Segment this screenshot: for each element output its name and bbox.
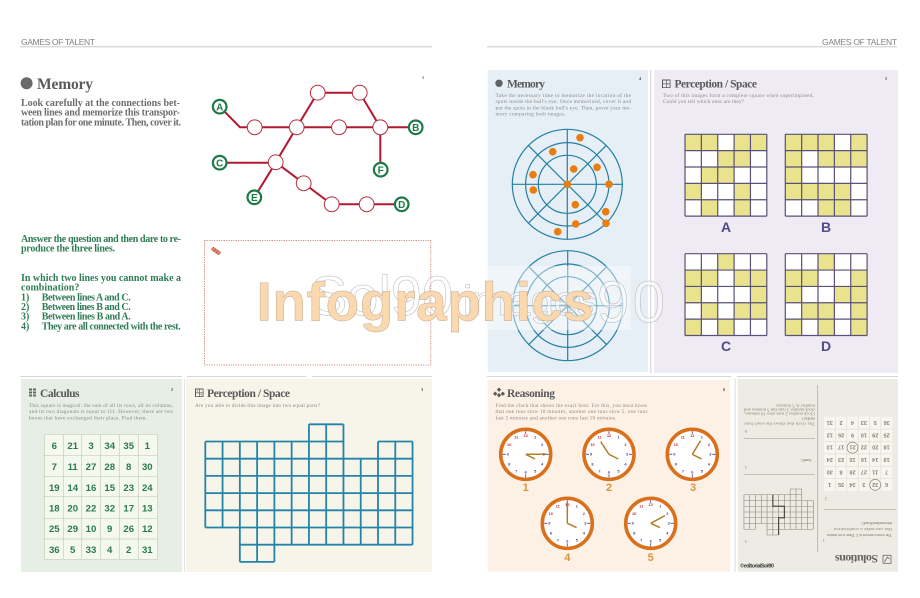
clock 3: 8	[675, 461, 678, 466]
clock 1	[501, 429, 551, 479]
magic square: 36	[49, 545, 60, 556]
clock 4: 1	[576, 503, 579, 508]
clock 5: 3	[668, 521, 671, 526]
blank bull's eye	[513, 251, 623, 361]
clock numbers: 5	[648, 552, 654, 564]
solution 2: magic square: 6	[885, 481, 888, 487]
solution 1: 1	[822, 538, 825, 543]
clock 2: 4	[624, 461, 627, 466]
watermark: Sol90images outline	[310, 264, 665, 335]
reasoning instructions: that one runs slow 10 minutes, another one runs slow 5, one runs	[496, 409, 648, 415]
solution 2: magic square: 7	[885, 468, 888, 474]
panel: perception squares	[654, 70, 898, 373]
solution 2: magic square: 2	[840, 419, 843, 425]
clock 4: 8	[550, 530, 553, 535]
solution 2: magic square: 19	[883, 456, 890, 462]
magic square: 19	[49, 483, 60, 494]
question text: Answer the question and then dare to re-	[21, 234, 181, 245]
magic square: 17	[123, 504, 134, 514]
solution 2: magic square: 11	[872, 468, 878, 474]
transport line map: E	[251, 193, 258, 204]
transport line map: C	[216, 158, 223, 169]
icon: memory dot	[21, 77, 33, 89]
question text: 2)	[21, 302, 29, 313]
clock numbers: 1	[523, 482, 529, 494]
magic square: 18	[49, 504, 60, 514]
magic square: 6	[52, 441, 57, 452]
calculus instructions: and its two diagonals is equal to 111. However, there are two	[29, 409, 173, 415]
reasoning instructions: Find the clock that shows the exact hour. For this, you must know	[496, 403, 648, 409]
clock 1: 12	[524, 433, 529, 438]
solution 2: magic square: 28	[849, 468, 856, 474]
magic square: 31	[142, 545, 153, 556]
clock 2: 1	[617, 434, 620, 439]
magic square: 21	[67, 441, 79, 452]
solution 2: magic square: 9	[851, 431, 854, 437]
square labels: A	[721, 219, 731, 235]
magic square: 14	[67, 483, 79, 494]
clock 2: 3	[626, 452, 629, 457]
solution 3: divided grid: 3	[744, 539, 747, 544]
solution 2: magic square: 8	[840, 468, 843, 474]
answer box with dotted border	[204, 240, 431, 365]
clock 4: 10	[549, 511, 553, 516]
watermark: Sol90images outline: 90	[597, 270, 665, 335]
clock 4: 9	[548, 521, 551, 526]
solution 2: magic square: 32	[872, 481, 878, 487]
clock 3: 1	[701, 434, 704, 439]
squares instructions: Two of this images form a complete square when superimposed.	[663, 92, 814, 99]
solution 2: magic square: 17	[838, 444, 844, 450]
bull's eye with spots	[512, 129, 622, 239]
magic square: 10	[86, 524, 96, 535]
reasoning instructions	[496, 403, 648, 421]
solution 5: A and C.	[800, 458, 812, 463]
clock 5: 6	[650, 538, 653, 543]
heading: Calculus: Calculus	[40, 388, 80, 400]
solution 2: magic square: 16	[861, 456, 867, 462]
solution 1: that can make a combination	[833, 527, 892, 532]
solution 6	[743, 402, 815, 434]
clock 1: 7	[515, 468, 517, 473]
question text: combination?	[21, 283, 79, 294]
question text	[21, 234, 181, 332]
clock 2: 6	[608, 469, 611, 474]
solution 2: magic square: 10	[861, 431, 867, 437]
transport line map: D	[398, 200, 405, 211]
solution 2: magic square: 15	[849, 456, 856, 462]
magic square: 7	[52, 462, 57, 473]
heading: Memory: Memory	[37, 76, 93, 93]
magic square: 9	[107, 524, 112, 535]
solution 6: Clock number 2 runs slow 10 minutes,	[744, 411, 815, 417]
solution 2: magic square: 3	[862, 481, 865, 487]
solution 1: between lines B and C.	[860, 521, 892, 526]
solutions dividers	[744, 385, 896, 552]
question text: Between lines B and C.	[42, 302, 131, 313]
magic square: 4	[107, 545, 113, 556]
square labels: D	[821, 338, 831, 354]
magic square: 15	[104, 483, 116, 494]
clock 3: 12	[690, 433, 695, 438]
instructions: ween lines and memorize this transpor-	[21, 108, 180, 119]
solution 5: 5	[744, 464, 747, 470]
watermark	[256, 264, 665, 335]
clock 1: 11	[514, 434, 519, 439]
memory instructions: Take the necessary time to memorize the location of the	[496, 92, 632, 99]
clock 1: 1	[534, 434, 537, 439]
panel: perception space left	[186, 379, 432, 572]
watermark: Infographics: Infographics	[256, 271, 594, 333]
clock 5: 8	[633, 530, 636, 535]
clock 1: 8	[508, 461, 511, 466]
icon: diamond cluster	[493, 388, 505, 397]
clock 5: 4	[666, 530, 669, 535]
instructions	[21, 98, 182, 128]
bottom rule lines left	[20, 376, 432, 378]
squares instructions: Could you tell which ones are they?	[663, 99, 745, 105]
clock 2: 9	[590, 452, 593, 457]
page number 1: 1	[422, 75, 425, 80]
solution 2: magic square: 26	[838, 431, 844, 437]
clock 3: 7	[682, 468, 684, 473]
clock 3: 3	[709, 452, 712, 457]
solution 2: magic square: 35	[838, 481, 844, 487]
magic square	[44, 434, 158, 559]
magic square: 22	[86, 504, 96, 514]
question text: produce the three lines.	[21, 244, 116, 255]
clock numbers	[523, 482, 696, 564]
panel divider left	[184, 379, 185, 572]
magic square: 26	[123, 524, 134, 535]
magic square: 11	[68, 462, 78, 473]
transport line map: A	[216, 102, 223, 113]
solution 1	[822, 521, 892, 543]
clock numbers: 2	[606, 482, 612, 494]
solution 2: magic square: 18	[883, 444, 890, 450]
magic square: 27	[86, 462, 96, 473]
squares instructions	[663, 92, 814, 105]
page number 3: 3	[421, 387, 424, 392]
heading: Perception / Space right: Perception / Space	[674, 78, 757, 90]
header: left page: GAMES OF TALENT	[21, 37, 95, 47]
solution 2: magic square: 33	[861, 419, 867, 425]
magic square: 30	[142, 462, 153, 473]
memory instructions	[496, 92, 632, 118]
panel: calculus	[21, 379, 182, 572]
clock 3: 5	[701, 468, 704, 473]
memory instructions: put the spots in the blank bull's eye. Then, prove your me-	[496, 105, 631, 111]
icon: perception small	[662, 80, 670, 88]
question text: In which two lines you cannot make a	[21, 273, 181, 284]
square labels	[721, 219, 831, 354]
icon: pencil	[211, 246, 221, 256]
clock 5: 9	[632, 521, 635, 526]
icon: solutions checkbox	[883, 555, 891, 563]
heading: Memory small: Memory	[507, 78, 545, 90]
square labels: C	[721, 338, 731, 354]
clock 4: 12	[565, 502, 570, 507]
solution 2: magic square: 5	[874, 419, 877, 425]
solution 5	[744, 458, 812, 470]
clock 5: 2	[666, 511, 669, 516]
watermark band	[488, 266, 631, 330]
upside-down solutions content	[743, 385, 896, 566]
solution 6: clock number 3 runs fast 5 minutes and	[743, 407, 815, 412]
panel: solutions	[738, 379, 898, 572]
page number 4: 4	[639, 76, 642, 81]
clock 1: 5	[534, 468, 537, 473]
clock 1: 4	[541, 461, 544, 466]
panel: memory bull's eye	[488, 70, 648, 372]
clock 2: 10	[590, 442, 595, 447]
magic square: 20	[67, 504, 78, 514]
solution 2: magic square: 30	[827, 468, 833, 474]
solution 2: magic square	[824, 417, 892, 502]
transport line map: F	[378, 165, 384, 176]
solution 2: magic square: 2	[824, 496, 827, 502]
header: right page: GAMES OF TALENT	[822, 37, 897, 47]
watermark: Sol90images outline: images	[463, 277, 598, 324]
solution 2: magic square: 1	[828, 481, 831, 487]
clock 1: 9	[507, 452, 510, 457]
magic square: 16	[86, 483, 96, 494]
page number 5: 5	[885, 76, 888, 81]
solution 2: magic square: 20	[872, 444, 878, 450]
magic square: 28	[104, 462, 116, 473]
panel divider reasoning	[735, 379, 736, 572]
icon: calculus	[29, 388, 36, 396]
question text: 1)	[21, 292, 29, 303]
magic square: 1	[145, 441, 151, 452]
clock 3: 6	[691, 469, 694, 474]
bottom rule lines right	[487, 376, 898, 378]
question text: Between lines A and C.	[42, 292, 131, 303]
icon: perception	[195, 388, 204, 397]
panel: reasoning	[488, 380, 730, 572]
reasoning instructions: fast 5 minutes and another one runs fast 10 minutes.	[496, 414, 616, 421]
clock 3: 9	[673, 452, 676, 457]
clock 2: 7	[598, 468, 601, 473]
clock 5	[626, 498, 676, 548]
clock 2: 11	[597, 434, 602, 439]
clock 2: 5	[617, 468, 620, 473]
calculus instructions: This square is magical: the sum of all its rows, all its columns,	[29, 402, 173, 409]
clock 1: 3	[543, 452, 546, 457]
page number 6: 6	[723, 387, 726, 392]
solution 2: magic square: 21	[849, 444, 856, 450]
magic square: 35	[123, 441, 135, 452]
solution 2: magic square: 14	[871, 456, 878, 462]
calculus instructions	[29, 402, 173, 421]
solution 6: 6	[744, 429, 747, 434]
panel: memory network	[21, 75, 431, 365]
grid figure to divide	[205, 424, 413, 562]
magic square: 25	[49, 524, 60, 535]
solution 2: magic square: 36	[883, 419, 890, 425]
square A	[685, 134, 767, 216]
question text: 3)	[21, 312, 29, 323]
clock 5: 7	[640, 537, 642, 542]
instructions: tation plan for one minute. Then, cover it.	[21, 117, 182, 128]
clock 2: 8	[591, 461, 594, 466]
perception instructions: Are you able to divide this image into two equal parts?	[195, 403, 321, 409]
clock 5: 11	[639, 503, 644, 508]
clock 1: 2	[541, 442, 544, 447]
clock 4: 2	[583, 511, 586, 516]
clock 2: 2	[624, 442, 627, 447]
solution 6: The clock that shows the exact hour	[744, 422, 815, 427]
magic square: 3	[88, 441, 94, 452]
transport line map: B	[412, 123, 419, 134]
clock 1: 6	[525, 469, 528, 474]
clock numbers: 3	[690, 482, 696, 494]
solution 2: magic square: 34	[849, 481, 856, 487]
clock 2	[584, 429, 634, 479]
magic square: 12	[142, 524, 153, 535]
question text: Between lines B and A.	[42, 312, 131, 323]
solution 2: magic square: 13	[827, 444, 833, 450]
square D	[785, 254, 867, 336]
clock 1: 10	[507, 442, 511, 447]
calculus instructions: boxes that have exchanged their place. Find them.	[29, 415, 147, 421]
clock 3: 11	[681, 434, 686, 439]
watermark: Sol90images outline: Sol90	[310, 264, 453, 327]
page number 2: 2	[171, 387, 174, 392]
magic square: 5	[70, 545, 76, 556]
clock 3	[667, 429, 717, 479]
question text: They are all connected with the rest.	[42, 321, 181, 332]
heading: Reasoning: Reasoning	[507, 388, 555, 400]
clock 4: 7	[557, 537, 559, 542]
clock 5: 10	[632, 511, 636, 516]
clock 3: 4	[708, 461, 711, 466]
square B	[785, 134, 867, 216]
clock 4	[542, 498, 592, 548]
clock numbers: 4	[564, 552, 571, 564]
clock 4: 6	[566, 538, 569, 543]
transport line map	[213, 85, 423, 212]
clock 5: 5	[659, 537, 662, 542]
magic square: 33	[86, 545, 96, 556]
solution 2: magic square: 24	[826, 456, 833, 462]
clock 3: 10	[674, 442, 678, 447]
magic square: 2	[126, 545, 131, 556]
solution 2: magic square: 22	[861, 444, 867, 450]
solution 3: divided grid	[744, 489, 813, 544]
square labels: B	[821, 219, 831, 235]
magic square: 29	[67, 524, 78, 535]
clock 3: 2	[708, 442, 711, 447]
memory instructions: spots inside the bull's eye. Once memorized, cover it and	[496, 99, 631, 105]
solution 6: number 1.	[801, 417, 815, 422]
icon: memory dot small	[495, 80, 503, 87]
magic square: 24	[142, 483, 153, 494]
solution 2: magic square: 29	[872, 431, 878, 437]
magic square: 13	[142, 504, 153, 514]
solution 6: number 4, 5 minutes.	[775, 402, 815, 408]
clock 5: 1	[659, 503, 662, 508]
magic square: 32	[104, 504, 115, 514]
solution 2: magic square: 4	[850, 419, 854, 425]
clock 4: 5	[576, 537, 579, 542]
solution 2: magic square: 27	[861, 468, 867, 474]
publisher credit: ©editorialSol90	[740, 562, 774, 570]
magic square: 8	[126, 462, 132, 473]
clock 5: 12	[649, 502, 654, 507]
instructions: Look carefully at the connections bet-	[21, 98, 180, 109]
heading: Perception / Space: Perception / Space	[207, 388, 290, 400]
memory instructions: mory comparing both images.	[496, 112, 566, 118]
solution 2: magic square: 12	[827, 431, 833, 437]
clock 4: 3	[584, 521, 587, 526]
magic square: 34	[104, 441, 116, 452]
panel divider right	[650, 70, 651, 373]
question text: 4)	[21, 321, 29, 332]
solution 2: magic square: 25	[883, 431, 890, 437]
magic square: 23	[123, 483, 134, 494]
solution 2: magic square: 23	[838, 456, 844, 462]
square C	[685, 254, 767, 336]
solution 1: The correct answer is 2. There is no station	[826, 533, 892, 538]
solution 2: magic square: 31	[827, 419, 833, 425]
clock 4: 4	[583, 530, 586, 535]
heading: Solutions: Solutions	[835, 552, 878, 566]
clock 2: 12	[607, 433, 612, 438]
clock 4: 11	[556, 503, 561, 508]
